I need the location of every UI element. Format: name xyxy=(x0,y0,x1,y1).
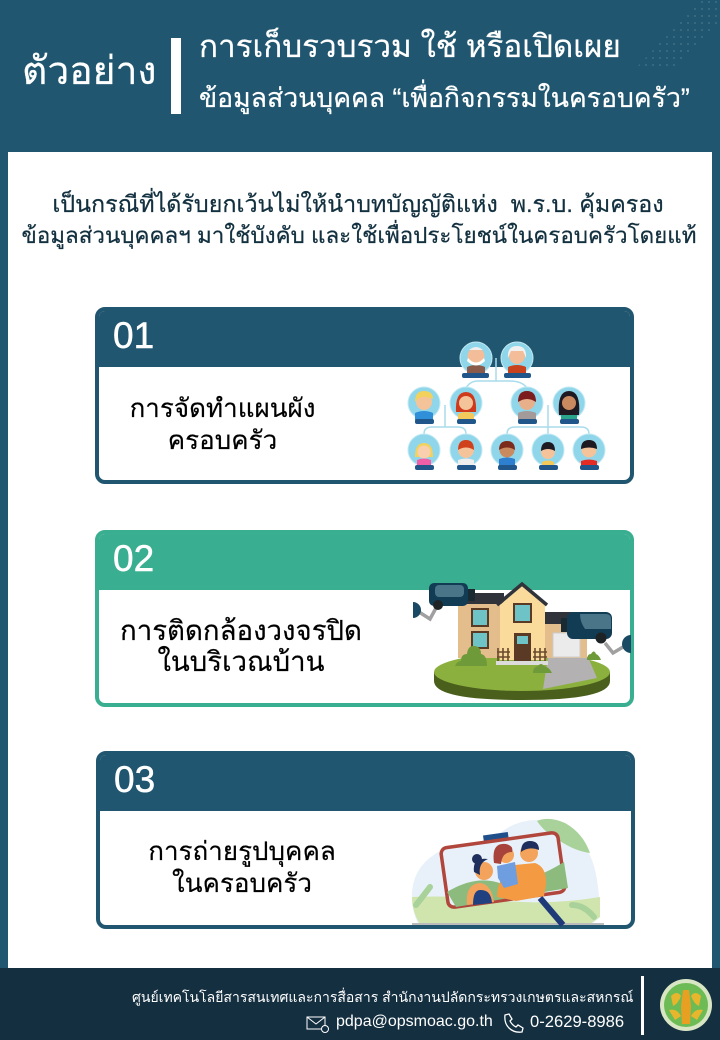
footer phone: 0-2629-8986 xyxy=(530,1012,624,1031)
footer xyxy=(0,968,720,1040)
title line 2: ข้อมูลส่วนบุคคล “เพื่อกิจกรรมในครอบครัว” xyxy=(199,83,690,113)
icon: family tree xyxy=(408,342,606,470)
card 02 xyxy=(95,530,634,707)
title left: ตัวอย่าง xyxy=(22,50,156,93)
header band xyxy=(0,0,720,152)
selfie stick xyxy=(540,898,563,925)
card 01 header xyxy=(95,307,634,367)
camera left xyxy=(413,583,475,619)
card 01 label: ครอบครัว xyxy=(168,425,277,455)
intro text: ข้อมูลส่วนบุคคลฯ มาใช้บังคับ และใช้เพื่อประโยชน์ในครอบครัวโดยแท้ xyxy=(22,223,696,248)
footer divider xyxy=(641,976,644,1035)
family members xyxy=(415,346,597,466)
name tags xyxy=(415,373,599,470)
white content panel xyxy=(8,152,712,968)
card 02 label xyxy=(120,615,362,677)
card 02 number: 02 xyxy=(113,538,154,579)
card 01 label: การจัดทำแผนผัง xyxy=(130,393,315,423)
icon: phone xyxy=(504,1013,524,1033)
intro text: เป็นกรณีที่ได้รับยกเว้นไม่ให้นำบทบัญญัติแห่ง พ.ร.บ. คุ้มครอง xyxy=(52,191,664,217)
card 01 label xyxy=(130,393,315,455)
card 02 header xyxy=(95,530,634,590)
dotted decoration xyxy=(638,2,716,66)
card 01 xyxy=(95,307,634,484)
intro text xyxy=(22,188,696,250)
card 03 number: 03 xyxy=(114,759,155,800)
footer email: pdpa@opsmoac.go.th xyxy=(336,1013,493,1030)
icon: family selfie xyxy=(412,818,604,927)
title divider xyxy=(171,38,181,114)
card 03 label: การถ่ายรูปบุคคล xyxy=(148,836,336,866)
title line 1: การเก็บรวบรวม ใช้ หรือเปิดเผย xyxy=(199,29,621,64)
phone xyxy=(439,825,566,908)
icon: email xyxy=(306,1016,329,1033)
card 02 label: การติดกล้องวงจรปิด xyxy=(120,615,362,646)
camera right xyxy=(561,612,631,653)
house xyxy=(455,584,601,673)
card 03 xyxy=(96,751,635,929)
background blob xyxy=(412,819,604,925)
card 02 label: ในบริเวณบ้าน xyxy=(157,646,325,677)
card 03 label: ในครอบครัว xyxy=(172,868,312,898)
lawn xyxy=(434,653,610,700)
icon: ministry seal xyxy=(660,979,712,1031)
card 03 header xyxy=(96,751,635,811)
card 01 number: 01 xyxy=(113,315,154,356)
card 03 label xyxy=(148,836,336,898)
family in photo xyxy=(447,841,568,907)
icon: house with CCTV cameras xyxy=(413,582,631,700)
footer organisation: ศูนย์เทคโนโลยีสารสนเทศและการสื่อสาร สำนักงานปลัดกระทรวงเกษตรและสหกรณ์ xyxy=(132,989,633,1005)
